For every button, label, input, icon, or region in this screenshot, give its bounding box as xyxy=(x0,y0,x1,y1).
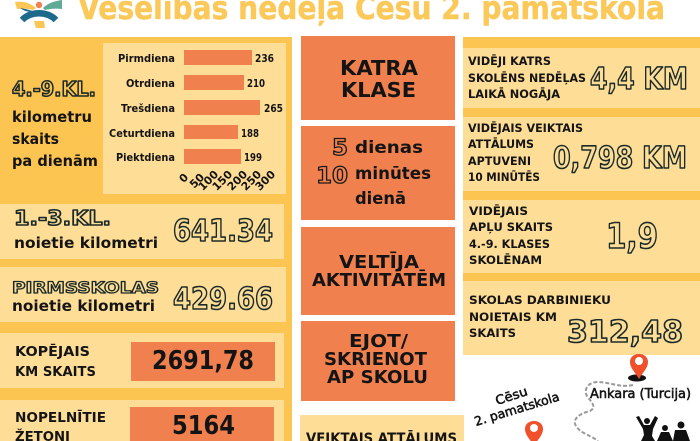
card: weekly average: LAIKĀ NOGĀJA xyxy=(468,87,560,101)
card: preschool: PIRMSSKOLAS xyxy=(12,278,159,297)
card: average laps: VIDĒJAIS xyxy=(469,204,528,218)
panel: every class xyxy=(301,36,455,120)
bar chart: kilometres per day: Ceturtdiena xyxy=(109,128,175,140)
panel: 5 days 10 minutes: dienas xyxy=(355,138,423,157)
panel: walking or running: AP SKOLU xyxy=(327,367,428,388)
card: average laps: SKOLĒNAM xyxy=(469,253,542,267)
text: kilometres per day heading: skaits xyxy=(12,130,59,148)
bar chart: kilometres per day: 199 xyxy=(244,152,262,164)
icon: school pin xyxy=(525,421,543,441)
panel: dedicated to activities: AKTIVITĀTĒM xyxy=(312,270,446,291)
card: total km xyxy=(0,333,284,388)
card: grades 1-3: noietie kilometri xyxy=(14,234,158,252)
card: average distance: VIDĒJAIS VEIKTAIS xyxy=(468,121,583,135)
bar chart: kilometres per day xyxy=(103,43,286,194)
text: kilometres per day heading: 4.-9.KL. xyxy=(12,77,96,101)
bar chart: kilometres per day: 0 xyxy=(177,171,191,186)
panel: walking or running: EJOT/ xyxy=(349,331,408,352)
bar chart: kilometres per day: 150 xyxy=(210,168,235,193)
bar chart: kilometres per day: 300 xyxy=(253,168,278,193)
panel: dedicated to activities xyxy=(301,227,455,315)
icon: Ankara pin xyxy=(628,354,648,382)
bar chart: kilometres per day: Piektdiena xyxy=(116,152,175,164)
card: staff km: SKAITS xyxy=(469,326,516,340)
label: school: 2. pamatskola xyxy=(472,389,561,429)
bar chart: kilometres per day: 50 xyxy=(187,171,207,191)
panel: 5 days 10 minutes: 5 xyxy=(332,136,348,161)
card: grades 1-3: 641.34 xyxy=(173,214,273,249)
panel: 5 days 10 minutes: 10 xyxy=(316,164,348,189)
card: average distance: ATTĀLUMS xyxy=(468,137,534,151)
panel: every class: KLASE xyxy=(341,78,416,102)
bar chart: kilometres per day: 200 xyxy=(225,168,250,193)
bar chart: kilometres per day: 236 xyxy=(255,53,274,65)
card: total km: 2691,78 xyxy=(152,346,254,376)
bar chart: kilometres per day: 250 xyxy=(239,168,264,193)
card: total km: KOPĒJAIS xyxy=(15,342,90,360)
card: weekly average xyxy=(463,48,700,108)
panel: 5 days 10 minutes: minūtes xyxy=(355,164,431,183)
card: average distance xyxy=(463,117,700,191)
bar chart: kilometres per day: 265 xyxy=(264,103,283,115)
text: kilometres per day heading xyxy=(12,77,98,170)
card: preschool: 429.66 xyxy=(173,282,273,317)
card: average laps: APĻU SKAITS xyxy=(469,220,553,234)
panel: left statistics xyxy=(0,37,292,441)
card: earned tokens: NOPELNĪTIE xyxy=(15,408,106,426)
card: preschool: noietie kilometri xyxy=(12,297,155,315)
panel: dedicated to activities: VELTĪJA xyxy=(339,252,419,273)
panel: distance covered xyxy=(300,415,464,441)
panel: walking or running xyxy=(301,321,455,401)
card: average distance: 10 MINŪTĒS xyxy=(468,169,540,184)
icon: runners xyxy=(636,416,690,441)
card: average laps: 4.-9. KLASES xyxy=(469,237,550,251)
card: weekly average: SKOLĒNS NEDĒĻAS xyxy=(468,71,586,85)
bar chart: kilometres per day: Trešdiena xyxy=(121,103,175,115)
label: school: Cēsu xyxy=(493,383,529,408)
card: average laps: 1,9 xyxy=(606,217,658,257)
card: average distance: APTUVENI xyxy=(468,154,531,168)
card: preschool xyxy=(0,267,286,322)
map: route from school to Ankara xyxy=(472,354,691,441)
panel: walking or running: SKRIENOT xyxy=(324,349,428,370)
bar chart: kilometres per day: 210 xyxy=(247,78,265,90)
card: staff km xyxy=(463,281,700,355)
panel: right statistics xyxy=(463,37,700,355)
bar chart: kilometres per day: 188 xyxy=(241,128,259,140)
card: staff km: SKOLAS DARBINIEKU xyxy=(469,293,611,307)
text: kilometres per day heading: pa dienām xyxy=(12,152,98,170)
card: earned tokens: 5164 xyxy=(172,411,235,441)
logo xyxy=(15,0,62,28)
text: kilometres per day heading: kilometru xyxy=(12,108,92,126)
card: staff km: 312,48 xyxy=(567,315,683,350)
card: average laps xyxy=(463,200,700,273)
card: earned tokens xyxy=(0,400,284,441)
bar chart: kilometres per day: Pirmdiena xyxy=(118,53,175,65)
card: grades 1-3 xyxy=(0,204,284,259)
card: grades 1-3: 1.-3.KL. xyxy=(14,206,111,230)
panel: 5 days 10 minutes: dienā xyxy=(355,189,406,208)
bar chart: kilometres per day: 100 xyxy=(196,168,221,193)
card: total km: KM SKAITS xyxy=(15,364,96,380)
card: weekly average: VIDĒJI KATRS xyxy=(468,54,551,68)
label: Ankara: Ankara (Turcija) xyxy=(590,387,691,402)
panel: every class: KATRA xyxy=(340,56,418,80)
card: staff km: NOIETAIS KM xyxy=(469,310,557,324)
panel: 5 days 10 minutes xyxy=(301,126,455,220)
bar chart: kilometres per day: Otrdiena xyxy=(126,78,175,90)
